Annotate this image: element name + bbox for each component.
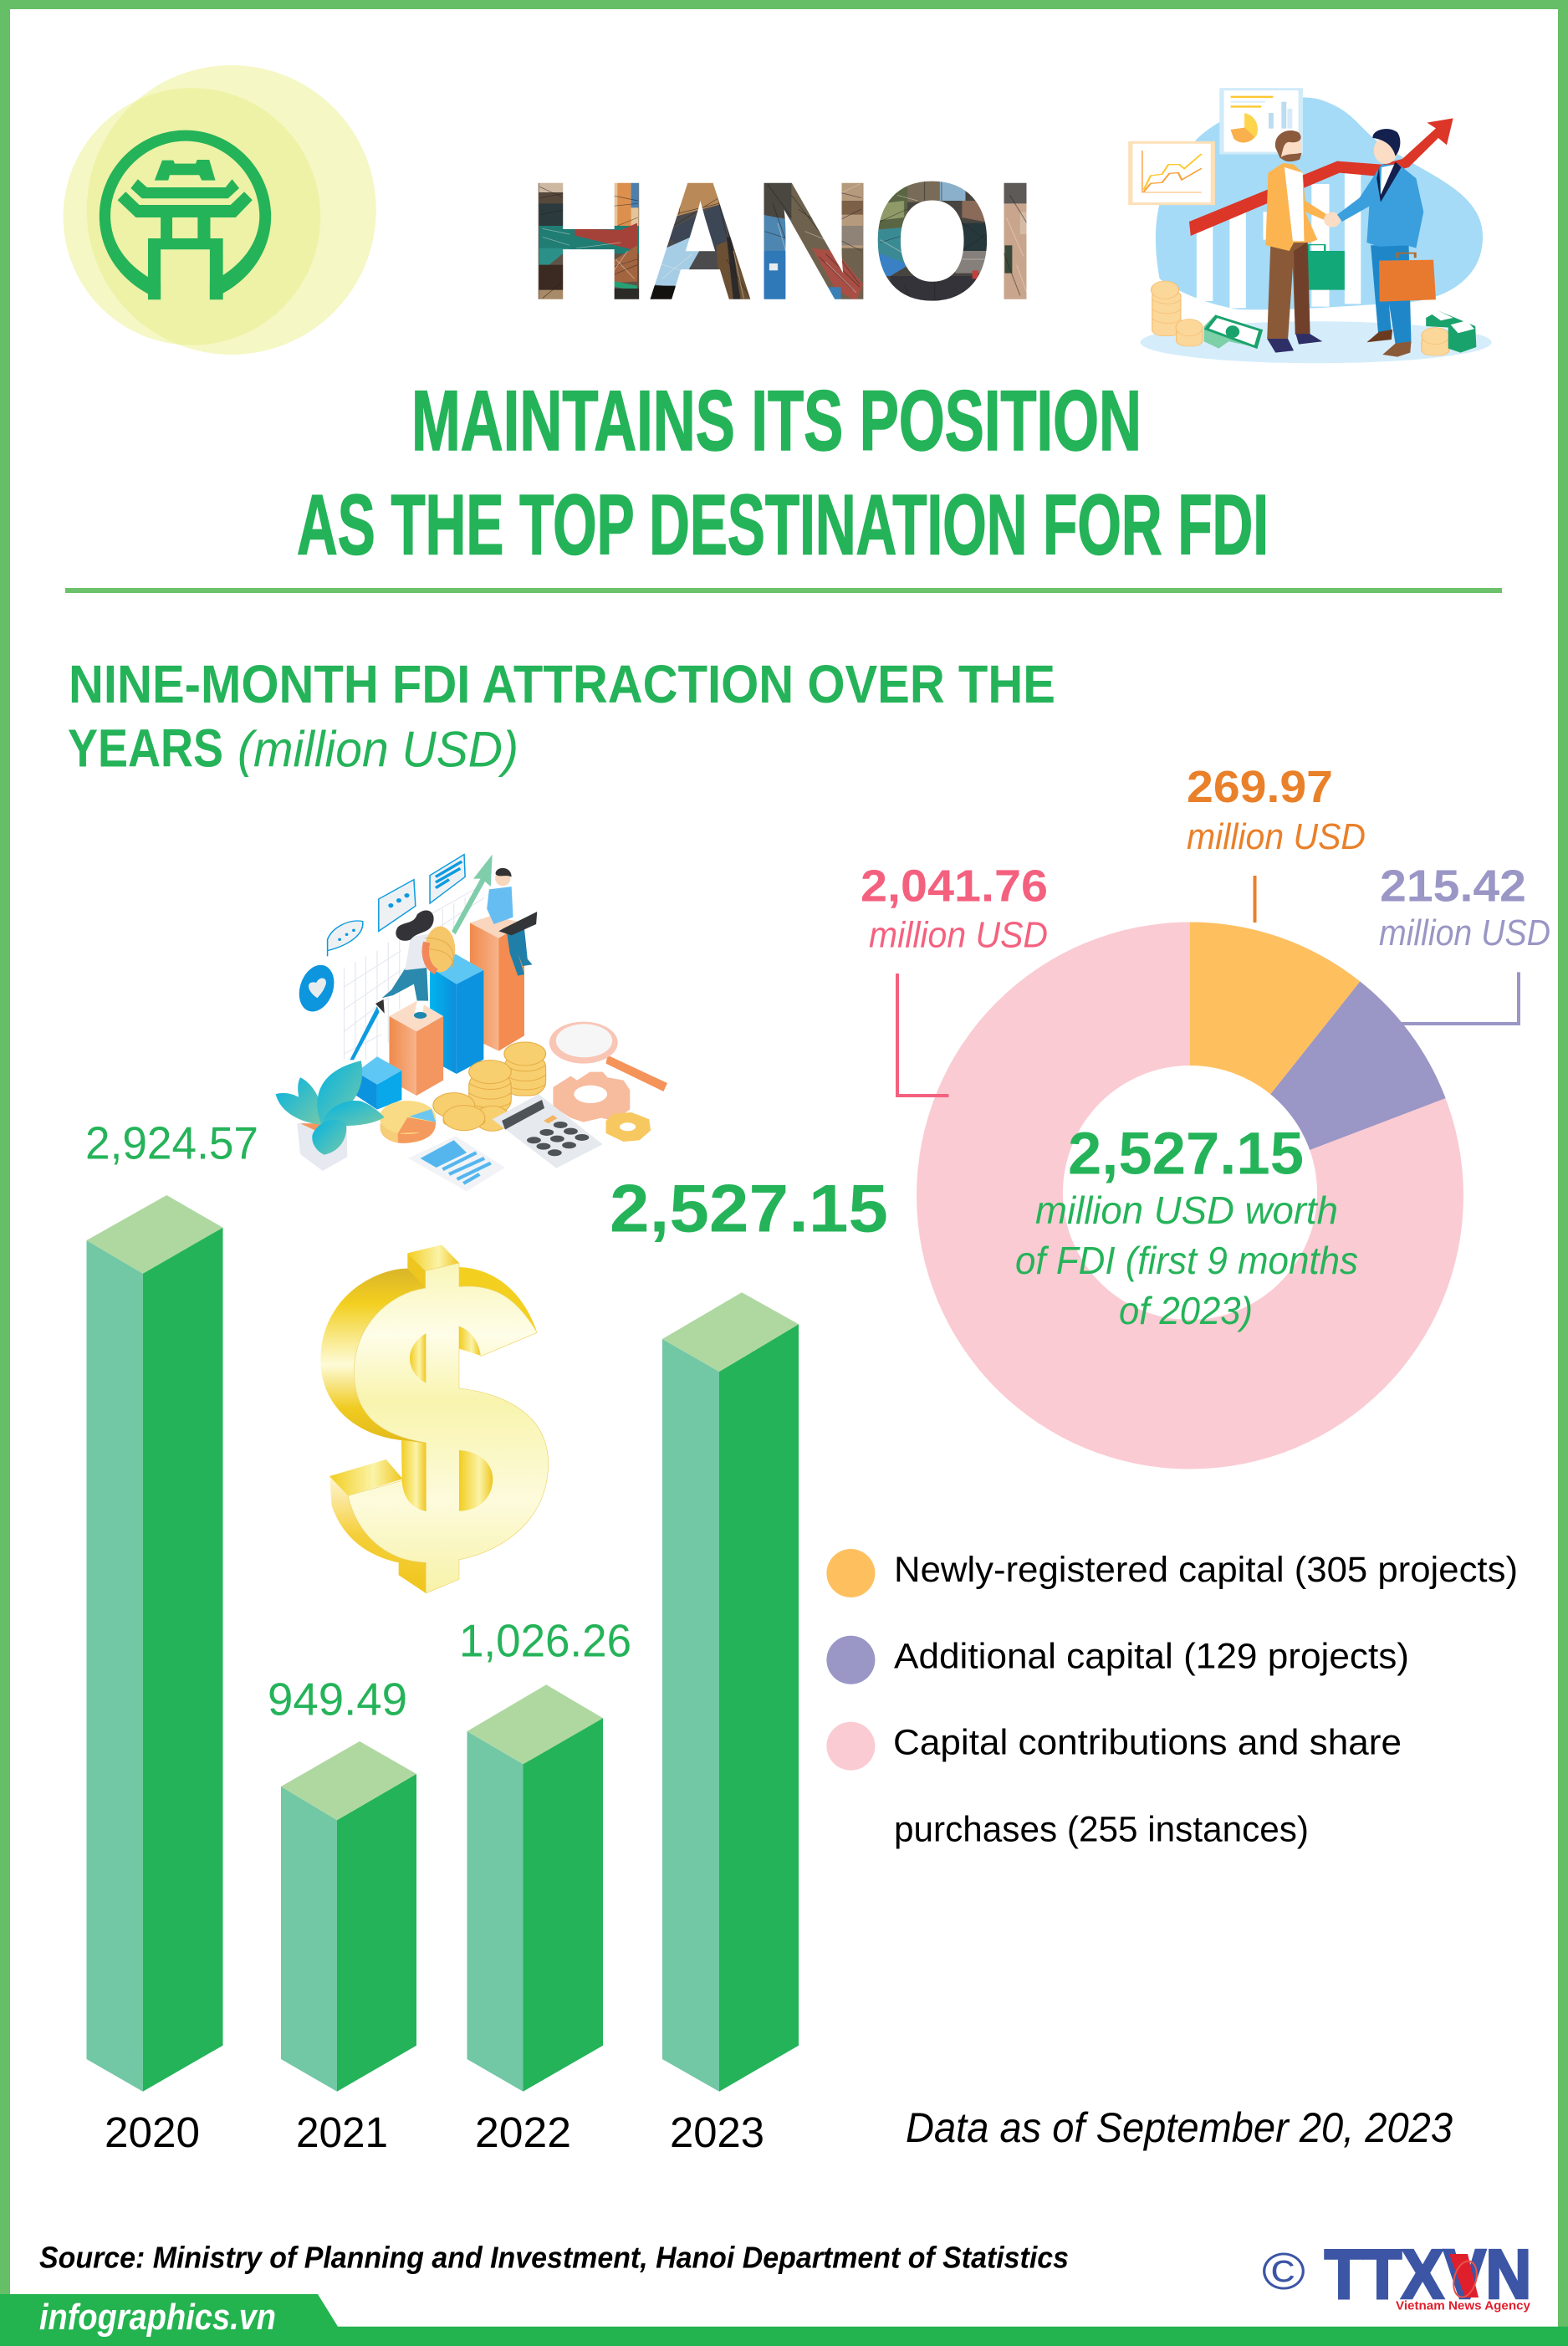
person: woman carrying coin [375,911,455,1019]
title: HANOI photo-filled wordmark: A [646,146,754,335]
donut chart: FDI structure 2023 [917,922,1463,1469]
donut hole [1063,1066,1317,1320]
bar: 2021 [281,1741,416,2092]
chart: isometric bars [356,916,524,1110]
heading: nine-month FDI attraction over the years: YEARS [68,718,223,779]
center total label: million USD worth [1035,1188,1338,1232]
slice: additional capital [1269,982,1446,1150]
callout: additional capital value [1379,861,1550,1024]
source line: Source: Ministry of Planning and Investment, Hanoi Department of Statistics [39,2241,1069,2275]
icon: 3D pie chart [380,1101,436,1143]
arrow: red growth arrow [1189,118,1453,236]
center total label: 2,527.15 [1068,1121,1304,1188]
bar value labels: 2,527.15 [610,1172,888,1247]
title: HANOI photo-filled wordmark: H [527,146,651,335]
bar value labels: 949.49 [268,1674,407,1725]
logo: TTXVN Vietnam News Agency: TTXVN [1325,2236,1531,2313]
logo: TTXVN Vietnam News Agency: © [1262,2243,1305,2301]
bar value labels: 1,026.26 [459,1615,631,1667]
callout: newly-registered value: million USD [1187,816,1366,857]
icon: speech bubbles and cards [328,855,465,956]
chart card: pie and bars [1222,89,1300,153]
year labels: 2023 [670,2108,764,2156]
bar chart: FDI by year [85,1117,888,2156]
center total label: of FDI (first 9 months [1015,1239,1358,1282]
heading: nine-month FDI attraction over the years [68,654,1055,779]
illustration: businessmen handshake with growth arrow [1131,89,1492,363]
legend: Additional capital (129 projects) [894,1637,1409,1677]
callout: capital contributions value: 2,041.76 [861,861,1048,912]
logo: TTXVN Vietnam News Agency: Vietnam News Agency [1396,2299,1531,2313]
callout: newly-registered value: 269.97 [1187,762,1333,812]
heading: nine-month FDI attraction over the years: NINE-MONTH FDI ATTRACTION OVER THE [69,654,1055,714]
slice: capital contributions [917,922,1463,1469]
person: man in blue suit with orange bag [1337,129,1436,357]
title: Maintains its position as the top destination for FDI [297,373,1269,573]
callout: additional capital value: 215.42 [1380,861,1526,912]
callout: newly-registered value [1187,762,1366,923]
icon: potted plant [276,1061,385,1171]
year labels: 2021 [296,2108,388,2156]
title: Maintains its position as the top destination for FDI: MAINTAINS ITS POSITION [411,373,1142,468]
person: man with laptop sitting on bar [487,868,537,976]
footer band with infographics.vn [0,2294,1568,2346]
bar: 2023 [662,1292,799,2092]
footer band with infographics.vn: infographics.vn [39,2297,276,2338]
icon: coin stacks [433,1042,546,1131]
year labels: 2022 [475,2108,571,2156]
arrow: blue growth arrow [350,1006,380,1060]
bar value labels [85,1117,888,1725]
icon: gears [553,1072,651,1142]
center total label [1015,1121,1358,1332]
icon: Hanoi logo on yellow circles [64,65,376,355]
year labels [105,2108,764,2156]
title: HANOI photo-filled wordmark: N [753,146,875,335]
bar value labels: 2,924.57 [85,1117,258,1168]
legend: Newly-registered capital (305 projects) [894,1550,1518,1590]
center total label: of 2023) [1119,1289,1253,1332]
legend: purchases (255 instances) [894,1810,1309,1850]
year labels: 2020 [105,2108,200,2156]
legend: Capital contributions and share [893,1723,1402,1763]
icon: calculator [493,1094,603,1168]
heading: nine-month FDI attraction over the years: (million USD) [237,722,518,778]
chart card: line graph [1131,142,1213,204]
icon: golden 3D dollar sign [320,1245,549,1593]
bar: 2020 [87,1195,222,2092]
person: man in yellow jacket with green bag [1265,130,1345,353]
slice: newly-registered capital [1190,922,1360,1096]
title: HANOI photo-filled wordmark: O [871,146,993,335]
arrow: green growth arrow [452,855,493,934]
callout: additional capital value: million USD [1379,912,1550,953]
note: data date: Data as of September 20, 2023 [906,2104,1453,2151]
illustration: isometric finance team with bar chart and coins [276,855,667,1191]
legend [826,1549,1518,1850]
icon: heart badge [294,962,340,1015]
callout: capital contributions value: million USD [869,915,1048,956]
icon: document [408,1136,505,1191]
title: HANOI photo-filled wordmark [527,146,1037,335]
bar: 2022 [467,1684,603,2092]
icon: magnifying glass [549,1022,667,1091]
callout: capital contributions value [861,861,1048,1096]
title: HANOI photo-filled wordmark: I [993,146,1037,335]
icon: banknotes [1204,311,1476,353]
icon: coin stacks [1152,281,1449,355]
